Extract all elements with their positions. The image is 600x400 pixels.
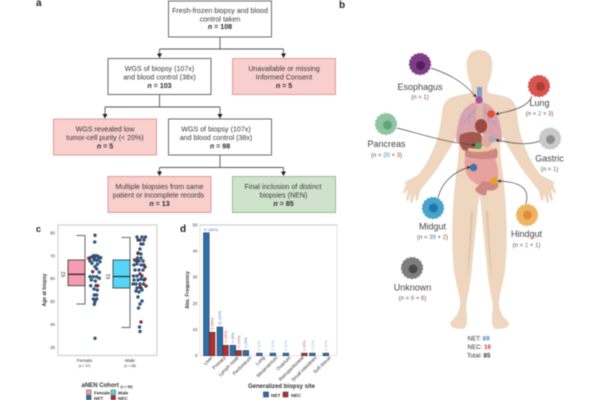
cell: Esophagus: Esophagus <box>397 82 443 92</box>
cell: Gastric: (n = 1) <box>541 167 558 173</box>
legend d <box>264 392 302 399</box>
NET value labels: 11 (16%) <box>218 311 222 325</box>
NET value labels: 47 (68%) <box>204 228 218 232</box>
box: WGS n=103: and blood control (38x) <box>123 74 196 82</box>
arrows <box>397 68 540 204</box>
box: multiple biopsies <box>108 176 211 212</box>
box: missing consent: n = 5 <box>276 82 292 90</box>
x axis category labels: Small intestines <box>290 355 319 383</box>
cell: Hindgut: (n = 1 + 1) <box>513 243 540 249</box>
panel label c: c <box>36 224 41 234</box>
y axis labels: 70 <box>50 253 56 258</box>
cell: Midgut: Midgut <box>419 222 447 232</box>
y axis labels: 40 <box>193 249 198 254</box>
totals: NET: 69 <box>468 336 490 342</box>
NEC value labels: 4 (25%) <box>224 330 228 343</box>
cell: Pancreas: (n = 20 + 3) <box>371 153 402 159</box>
flowchart connectors <box>102 37 286 176</box>
y axis labels: 30 <box>193 275 198 280</box>
NET value labels: 1 (1%) <box>324 340 328 351</box>
y axis labels <box>50 230 56 350</box>
x axis category labels: Lung <box>255 355 267 367</box>
x axis category labels: Peritoneum <box>232 355 253 377</box>
marker dots on organs <box>470 96 498 185</box>
cell: Hindgut <box>511 204 543 249</box>
box: final inclusion <box>232 176 336 212</box>
cell: Gastric: Gastric <box>535 154 564 164</box>
box: final inclusion: Final inclusion of distinct <box>245 183 321 191</box>
plot frame <box>200 225 337 356</box>
NET bars <box>204 233 329 356</box>
female dots <box>87 234 102 340</box>
box: biopsy taken: control taken <box>200 16 240 24</box>
NEC bars <box>209 332 307 356</box>
cell: Midgut <box>417 197 448 241</box>
panel label b: b <box>339 0 345 11</box>
box: WGS n=103: WGS of biopsy (107x) <box>125 65 194 73</box>
x axis labels: (n = 48) <box>124 364 136 368</box>
x axis title: Generalized biopsy site <box>248 384 316 390</box>
cell: Unknown: (n = 6 + 6) <box>399 296 426 302</box>
NET value labels: 2 (3%) <box>244 337 248 348</box>
y axis labels: 0 <box>195 353 198 358</box>
x axis labels: Female <box>77 358 93 363</box>
y axis labels: 50 <box>50 299 56 304</box>
box: multiple biopsies: Multiple biopsies from same <box>116 183 204 191</box>
box: final inclusion: biopsies (NEN) <box>260 192 307 200</box>
totals: Total: 85 <box>467 352 491 360</box>
x axis labels <box>77 358 136 368</box>
cell: Midgut: (n = 39 + 2) <box>417 235 448 241</box>
cell: Unknown: Unknown <box>394 282 431 292</box>
NET value labels: 1 (1%) <box>284 340 288 351</box>
box: WGS n=98: and blood control (38x) <box>180 134 252 142</box>
legend c: Female <box>94 390 110 395</box>
box: WGS n=98: n = 98 <box>210 142 230 150</box>
NET value labels: 4 (6%) <box>231 332 235 343</box>
box: multiple biopsies: patient or incomplete records <box>113 192 205 200</box>
box: low purity: tumor-cell purity (< 20%) <box>66 134 144 142</box>
y axis title: Abs. Frequency <box>185 271 191 309</box>
NET value labels <box>204 228 328 351</box>
legend d: NEC <box>291 393 302 399</box>
legend c: aNEN Cohort <box>82 383 119 389</box>
male box: 61 <box>106 274 112 279</box>
panel label d: d <box>180 224 186 235</box>
plot frame <box>58 225 157 356</box>
cell: Unknown <box>394 257 431 302</box>
cell: Gastric <box>535 128 564 173</box>
panel: flowchart a <box>36 0 336 212</box>
cell: Lung: (n = 2 + 3) <box>526 112 553 118</box>
cell: Esophagus <box>397 53 443 101</box>
NEC value labels: 9 (56%) <box>210 317 214 330</box>
y axis labels: 60 <box>50 276 56 281</box>
box: WGS n=103: n = 103 <box>147 82 172 90</box>
box: WGS n=98: WGS of biopsy (107x) <box>181 126 251 134</box>
x axis category labels: Retroperitoneal <box>278 355 305 383</box>
male box <box>106 238 130 328</box>
NET value labels: 1 (1%) <box>311 340 315 351</box>
box: biopsy taken: n = 108 <box>208 23 232 31</box>
cell: Pancreas <box>367 113 406 159</box>
NET value labels: 1 (1%) <box>257 340 261 351</box>
female box <box>61 236 85 304</box>
x axis category labels: Primary <box>211 355 228 371</box>
box: low purity: WGS revealed low <box>76 126 135 134</box>
cell: Lung <box>526 75 553 118</box>
x axis category labels: Lymph node <box>218 355 241 378</box>
y axis labels: 50 <box>193 222 198 228</box>
box: low purity <box>54 119 156 155</box>
y axis labels: 80 <box>50 230 56 236</box>
cell: Hindgut: Hindgut <box>511 229 543 239</box>
x axis category labels: Mesenterium <box>256 355 279 379</box>
NEC value labels <box>210 317 306 351</box>
x axis category labels: Ovarium <box>275 355 292 372</box>
cell: Esophagus: (n = 1) <box>411 95 429 101</box>
x axis labels: Male <box>125 358 135 363</box>
box: missing consent <box>232 58 336 94</box>
box: WGS n=103 <box>108 58 211 94</box>
panel: biopsy site bar chart d <box>180 222 337 399</box>
totals <box>467 336 491 360</box>
NEC value labels: 2 (13%) <box>237 335 241 348</box>
NEC value labels: 1 (6%) <box>302 340 306 351</box>
x axis category labels: Liver <box>203 355 215 367</box>
legend c <box>82 383 132 400</box>
y axis title: Age at biopsy <box>42 273 48 306</box>
panel: anatomy b <box>339 0 564 360</box>
legend c: Male <box>118 390 129 395</box>
box: missing consent: Informed Consent <box>256 74 312 82</box>
cell: Lung: Lung <box>529 98 550 108</box>
icon: organs <box>456 87 502 195</box>
box: low purity: n = 5 <box>97 142 113 150</box>
x axis category labels: Soft tissue <box>312 355 333 375</box>
legend c: (n = 85) <box>121 385 132 389</box>
box: biopsy taken <box>168 1 272 37</box>
panel: age box plot c <box>36 224 157 400</box>
NET value labels: 1 (1%) <box>271 340 275 351</box>
y axis labels: 40 <box>50 322 56 327</box>
female box: 62 <box>61 271 67 277</box>
y axis labels: 30 <box>50 345 56 350</box>
icon: human body <box>403 50 556 329</box>
box: final inclusion: n = 85 <box>273 200 294 208</box>
y axis labels: 20 <box>193 301 198 306</box>
x axis category labels <box>203 355 333 383</box>
box: multiple biopsies: n = 13 <box>149 200 170 208</box>
box: biopsy taken: Fresh-frozen biopsy and blood <box>172 7 268 15</box>
y axis labels: 10 <box>193 327 198 332</box>
x axis labels: (n = 37) <box>79 364 90 368</box>
box: WGS n=98 <box>168 119 272 155</box>
totals: NEC: 16 <box>468 344 491 351</box>
male dots <box>132 236 148 333</box>
box: missing consent: Unavailable or missing <box>248 65 320 73</box>
legend d: NET <box>271 393 281 399</box>
cell: Pancreas: Pancreas <box>367 139 406 149</box>
y axis labels <box>193 222 198 358</box>
